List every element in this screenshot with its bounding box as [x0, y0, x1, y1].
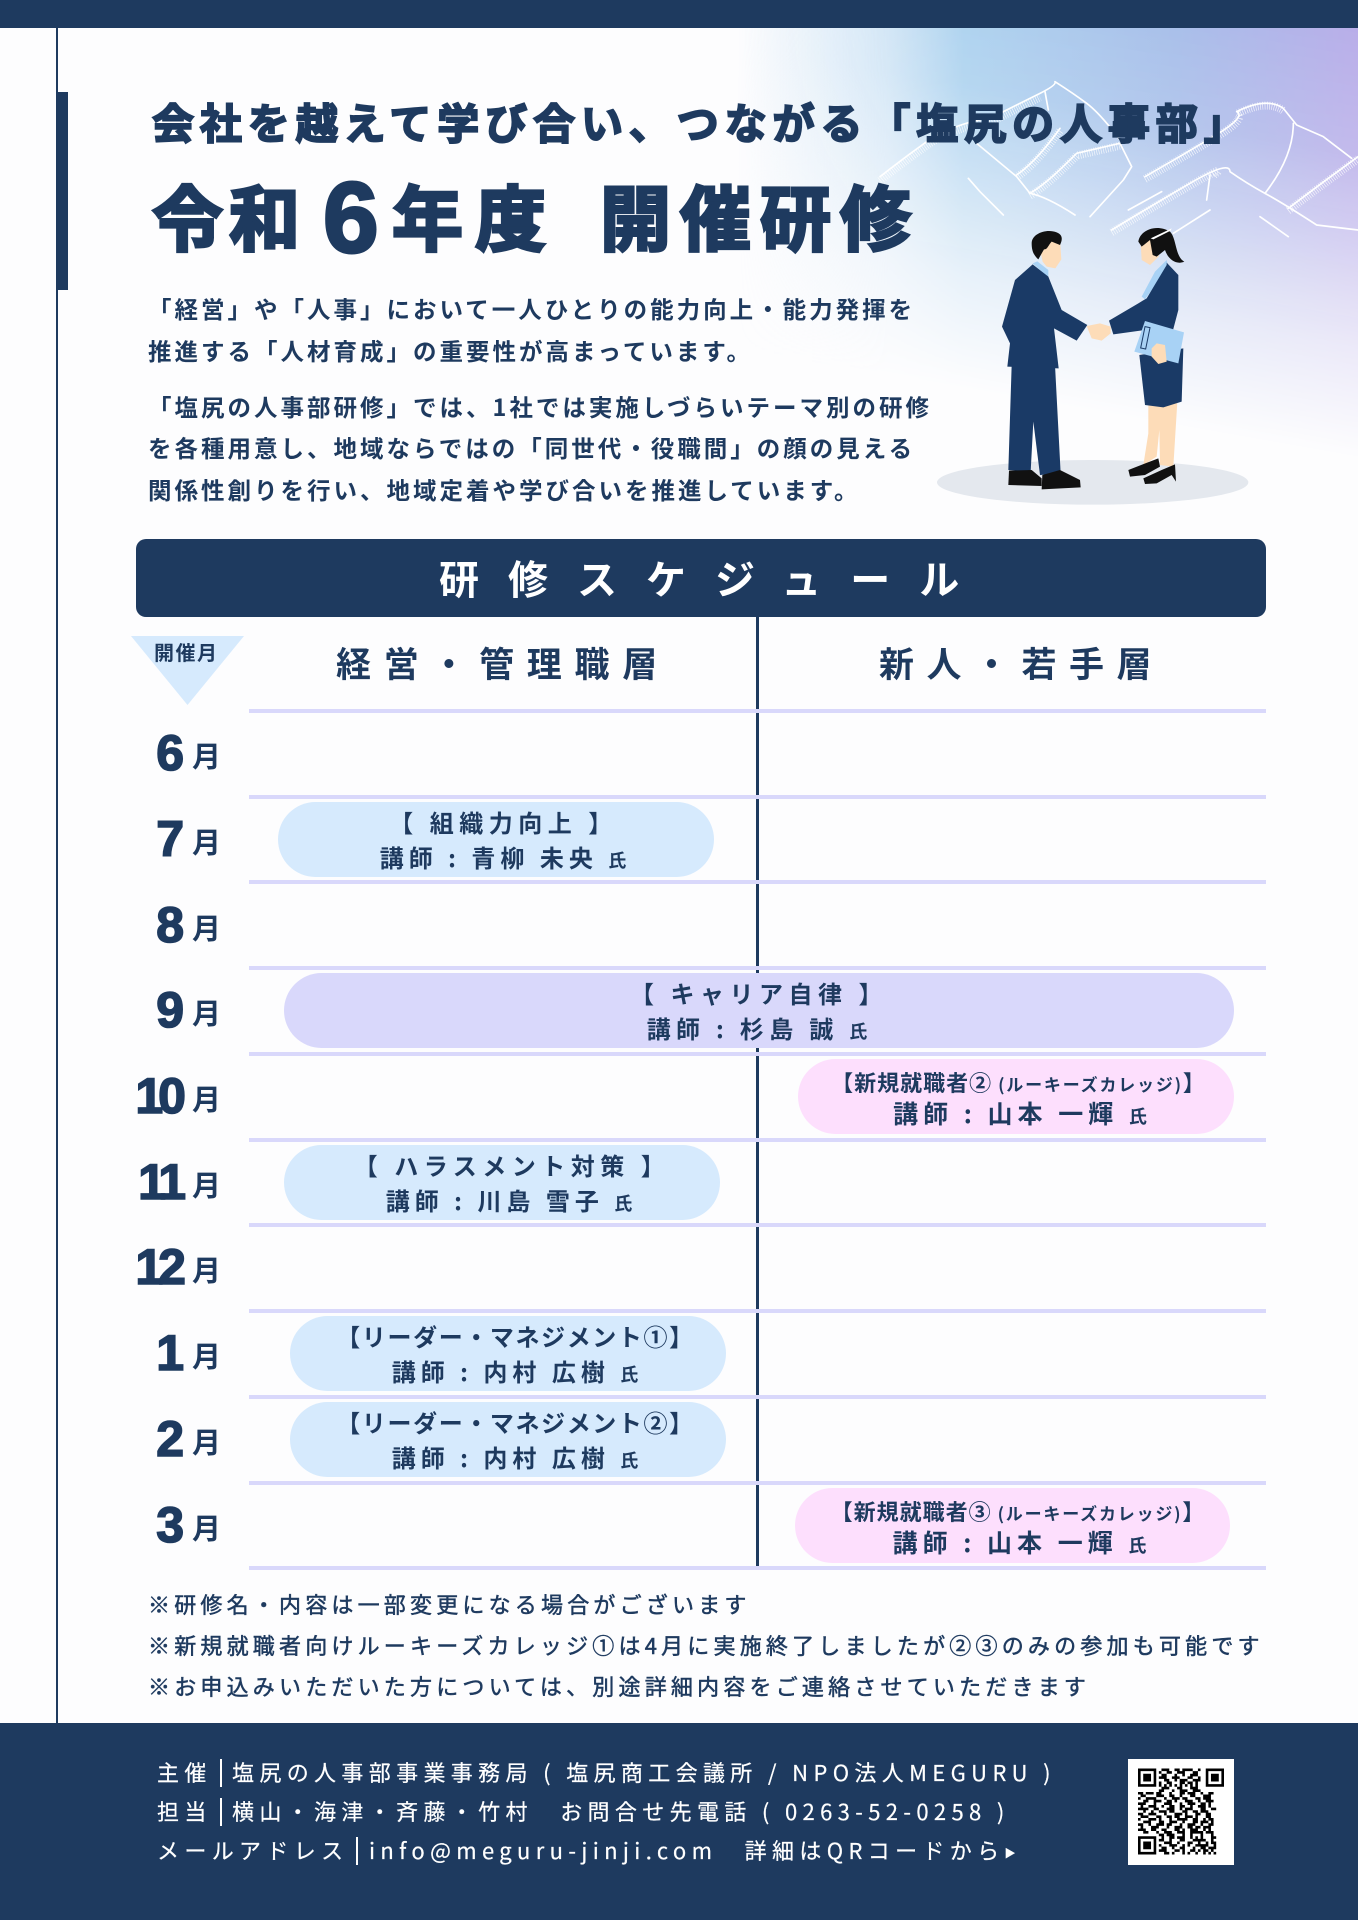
- footnotes: ※研修名・内容は一部変更になる場合がございます: [148, 1588, 751, 1620]
- footer band: info@meguru-jinji.com 詳細はQRコードから▶: [369, 1834, 1015, 1866]
- email line: メールアドレス: [157, 1834, 348, 1866]
- pill: career autonomy: 講師 : 杉島 誠 氏: [647, 1010, 867, 1045]
- month: September: [156, 982, 221, 1038]
- pill: leader management 1: [290, 1316, 726, 1391]
- month column marker triangle: [131, 636, 244, 705]
- month: December: 月: [192, 1248, 221, 1290]
- footnotes: [148, 1588, 1264, 1702]
- left accent bar: [57, 92, 68, 290]
- month: February: [156, 1411, 221, 1467]
- column heading: management: 経営・管理職層: [336, 637, 670, 688]
- pill: leader management 1: 講師 : 内村 広樹 氏: [392, 1353, 638, 1388]
- footnotes: ※新規就職者向けルーキーズカレッジ①は4月に実施終了しましたが②③のみの参加も可能です: [148, 1629, 1264, 1661]
- intro text block: 関係性創りを行い、地域定着や学び合いを推進しています。: [148, 472, 860, 506]
- pill: leader management 2: 講師 : 内村 広樹 氏: [392, 1439, 638, 1474]
- footer band: 塩尻の人事部事業事務局 ( 塩尻商工会議所 / NPO法人MEGURU ): [232, 1756, 1056, 1788]
- month: September: 月: [192, 991, 221, 1033]
- footer band: [0, 1723, 1358, 1920]
- heading: main title: [151, 162, 920, 274]
- month: February: 月: [192, 1420, 221, 1462]
- schedule header bar: 研修スケジュール: [439, 548, 988, 606]
- intro text block: 「経営」や「人事」において一人ひとりの能力向上・能力発揮を: [148, 291, 915, 325]
- organizer line: 主催: [157, 1756, 212, 1788]
- month: January: 1: [156, 1325, 184, 1381]
- heading: main title: 6: [323, 162, 388, 274]
- pill: new hires 3: 講師 : 山本 一輝 氏: [893, 1524, 1146, 1560]
- month column marker triangle: 開催月: [154, 637, 218, 666]
- month: January: 月: [192, 1334, 221, 1376]
- pill: new hires 2: [798, 1059, 1234, 1134]
- pill: leader management 2: 【リーダー・マネジメント②】: [336, 1404, 695, 1439]
- month: July: 7: [156, 811, 184, 867]
- pill: new hires 2: 講師 : 山本 一輝 氏: [893, 1095, 1147, 1131]
- top header band: [0, 0, 1358, 28]
- month: December: 12: [135, 1239, 181, 1295]
- intro text block: 「塩尻の人事部研修」では、1社では実施しづらいテーマ別の研修: [148, 389, 932, 423]
- column heading: new hires: 新人・若手層: [879, 637, 1164, 688]
- month: March: [156, 1497, 221, 1553]
- month: October: 10: [135, 1068, 181, 1124]
- QR code: [1128, 1759, 1234, 1865]
- month: November: [138, 1154, 221, 1210]
- month: October: [135, 1068, 221, 1124]
- month: February: 2: [156, 1411, 184, 1467]
- month: January: [156, 1325, 221, 1381]
- pill: harassment: [284, 1145, 720, 1220]
- illustration: mountain line art: [878, 80, 1358, 238]
- heading: subtitle: 会社を越えて学び合い、つながる「塩尻の人事部」: [152, 91, 1252, 152]
- heading: main title: 令和: [152, 164, 306, 266]
- pill: leader management 1: 【リーダー・マネジメント①】: [336, 1318, 695, 1353]
- month: October: 月: [192, 1077, 221, 1119]
- month: November: 月: [192, 1163, 221, 1205]
- pill: new hires 3: [795, 1488, 1230, 1563]
- pill: harassment: 【 ハラスメント対策 】: [354, 1147, 670, 1182]
- pill: career autonomy: 【 キャリア自律 】: [630, 975, 888, 1010]
- contact line: 担当: [157, 1795, 212, 1827]
- pill: organization: 講師 : 青柳 未央 氏: [380, 839, 626, 874]
- month: June: 6: [156, 725, 184, 781]
- pill: leader management 2: [290, 1402, 726, 1477]
- intro text block: を各種用意し、地域ならではの「同世代・役職間」の顔の見える: [148, 430, 915, 464]
- month: September: 9: [156, 982, 184, 1038]
- month: December: [135, 1239, 221, 1295]
- month: June: [156, 725, 221, 781]
- month: March: 3: [156, 1497, 184, 1553]
- heading: main title: 開催研修: [600, 164, 920, 266]
- center column divider: [756, 617, 758, 1568]
- month: July: [156, 811, 221, 867]
- pill: harassment: 講師 : 川島 雪子 氏: [386, 1182, 632, 1217]
- month: June: 月: [192, 734, 221, 776]
- heading: main title: 年度: [392, 164, 558, 266]
- pill: new hires 3: 【新規就職者③ (ルーキーズカレッジ)】: [831, 1495, 1205, 1527]
- pill: new hires 2: 【新規就職者② (ルーキーズカレッジ)】: [831, 1066, 1206, 1098]
- month: November: 11: [138, 1154, 181, 1210]
- month: August: 月: [192, 906, 221, 948]
- pill: career autonomy: [284, 973, 1234, 1048]
- pill: organization: [278, 802, 714, 877]
- intro text block: 推進する「人材育成」の重要性が高まっています。: [148, 333, 753, 367]
- schedule header bar: [136, 539, 1266, 617]
- intro text block: [148, 291, 932, 506]
- month: August: [156, 897, 221, 953]
- pill: organization: 【 組織力向上 】: [389, 804, 618, 839]
- background gradient: sky: [764, 28, 1358, 412]
- month: July: 月: [192, 820, 221, 862]
- footnotes: ※お申込みいただいた方については、別途詳細内容をご連絡させていただきます: [148, 1670, 1090, 1702]
- footer band: 横山・海津・斉藤・竹村 お問合せ先電話 ( 0263-52-0258 ): [232, 1795, 1010, 1827]
- month: August: 8: [156, 897, 184, 953]
- left vertical rule: [56, 28, 58, 1723]
- illustration: handshake figures: [937, 228, 1248, 504]
- month: March: 月: [192, 1506, 221, 1548]
